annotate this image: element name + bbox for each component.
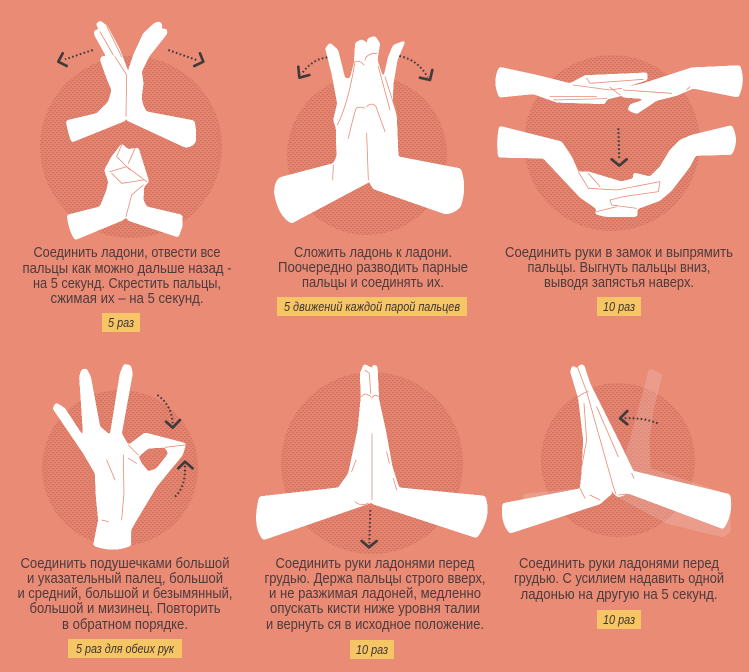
dotted circle 5 [281, 372, 463, 554]
text 5: и вернуть ся в исходное положение. [266, 617, 484, 633]
hands 1 [66, 21, 196, 240]
text 1: пальцы как можно дальше назад - [22, 261, 232, 277]
text 3: пальцы. Выгнуть пальцы вниз, [528, 260, 710, 276]
text 2: пальцы и соединять их. [302, 275, 444, 291]
text 1: сжимая их – на 5 секунд. [50, 291, 204, 307]
hands 6 [502, 364, 731, 537]
hands 5 [256, 364, 487, 540]
text 4: Соединить подушечками большой [20, 556, 230, 572]
arrow 3 [612, 128, 627, 166]
badge 1: 5 раз [108, 315, 134, 330]
hands 2 [274, 36, 464, 223]
text 4: в обратном порядке. [62, 617, 188, 633]
dotted circle 6 [541, 383, 695, 537]
badge 3 [597, 297, 641, 316]
text 4 [18, 556, 232, 633]
badge 1 [102, 313, 140, 332]
dotted circle 3 [524, 55, 700, 231]
text 3 [505, 245, 733, 291]
panel: exercise 3 [495, 55, 743, 316]
text 1 [22, 245, 232, 307]
badge 3: 10 раз [603, 299, 635, 314]
text 2: Поочередно разводить парные [278, 260, 468, 276]
text 4: и указательный палец, большой [27, 571, 223, 587]
panel: exercise 1 [22, 21, 232, 332]
text 5: грудью. Держа пальцы строго вверх, [264, 571, 486, 587]
badge 4: 5 раз для обеих рук [76, 641, 175, 656]
text 6: Соединить руки ладонями перед [519, 556, 719, 572]
badge 6 [597, 610, 641, 629]
text 2 [278, 245, 468, 291]
arrows 1 [58, 50, 203, 66]
text 2: Сложить ладонь к ладони. [294, 245, 452, 261]
panel: exercise 6 [502, 364, 731, 629]
text 4: большой и мизинец. Повторить [30, 601, 220, 617]
dotted circle 2 [287, 75, 447, 235]
dotted circle 1 [40, 56, 222, 238]
text 6: ладонью на другую на 5 секунд. [520, 587, 718, 603]
text 4: и средний, большой и безымянный, [18, 586, 232, 602]
text 1: Соединить ладони, отвести все [34, 245, 220, 261]
hand 4 [53, 364, 186, 549]
arrow 5 [362, 510, 377, 547]
badge 5: 10 раз [356, 642, 388, 657]
badge 6: 10 раз [603, 612, 635, 627]
panel: exercise 2 [274, 36, 468, 316]
badge 2: 5 движений каждой парой пальцев [284, 299, 460, 314]
dotted circle 4 [42, 390, 198, 546]
text 3: выводя запястья наверх. [544, 275, 694, 291]
text 5 [264, 556, 486, 633]
badge 5 [350, 640, 394, 659]
badge 4 [68, 639, 182, 658]
text 6: грудью. С усилием надавить одной [514, 571, 724, 587]
arrows 2 [298, 56, 432, 80]
text 6 [514, 556, 724, 603]
panel: exercise 4 [18, 364, 232, 658]
arrows 4 [157, 395, 193, 497]
badge 2 [277, 297, 467, 316]
text 5: опускать кисти ниже уровня талии [270, 601, 480, 617]
text 5: и не разжимая ладоней, медленно [269, 586, 481, 602]
arrow 6 [620, 411, 658, 424]
hands 3 [495, 65, 743, 217]
panel: exercise 5 [256, 364, 487, 659]
text 1: на 5 секунд. Скрестить пальцы, [33, 276, 221, 292]
text 5: Соединить руки ладонями перед [276, 556, 475, 572]
